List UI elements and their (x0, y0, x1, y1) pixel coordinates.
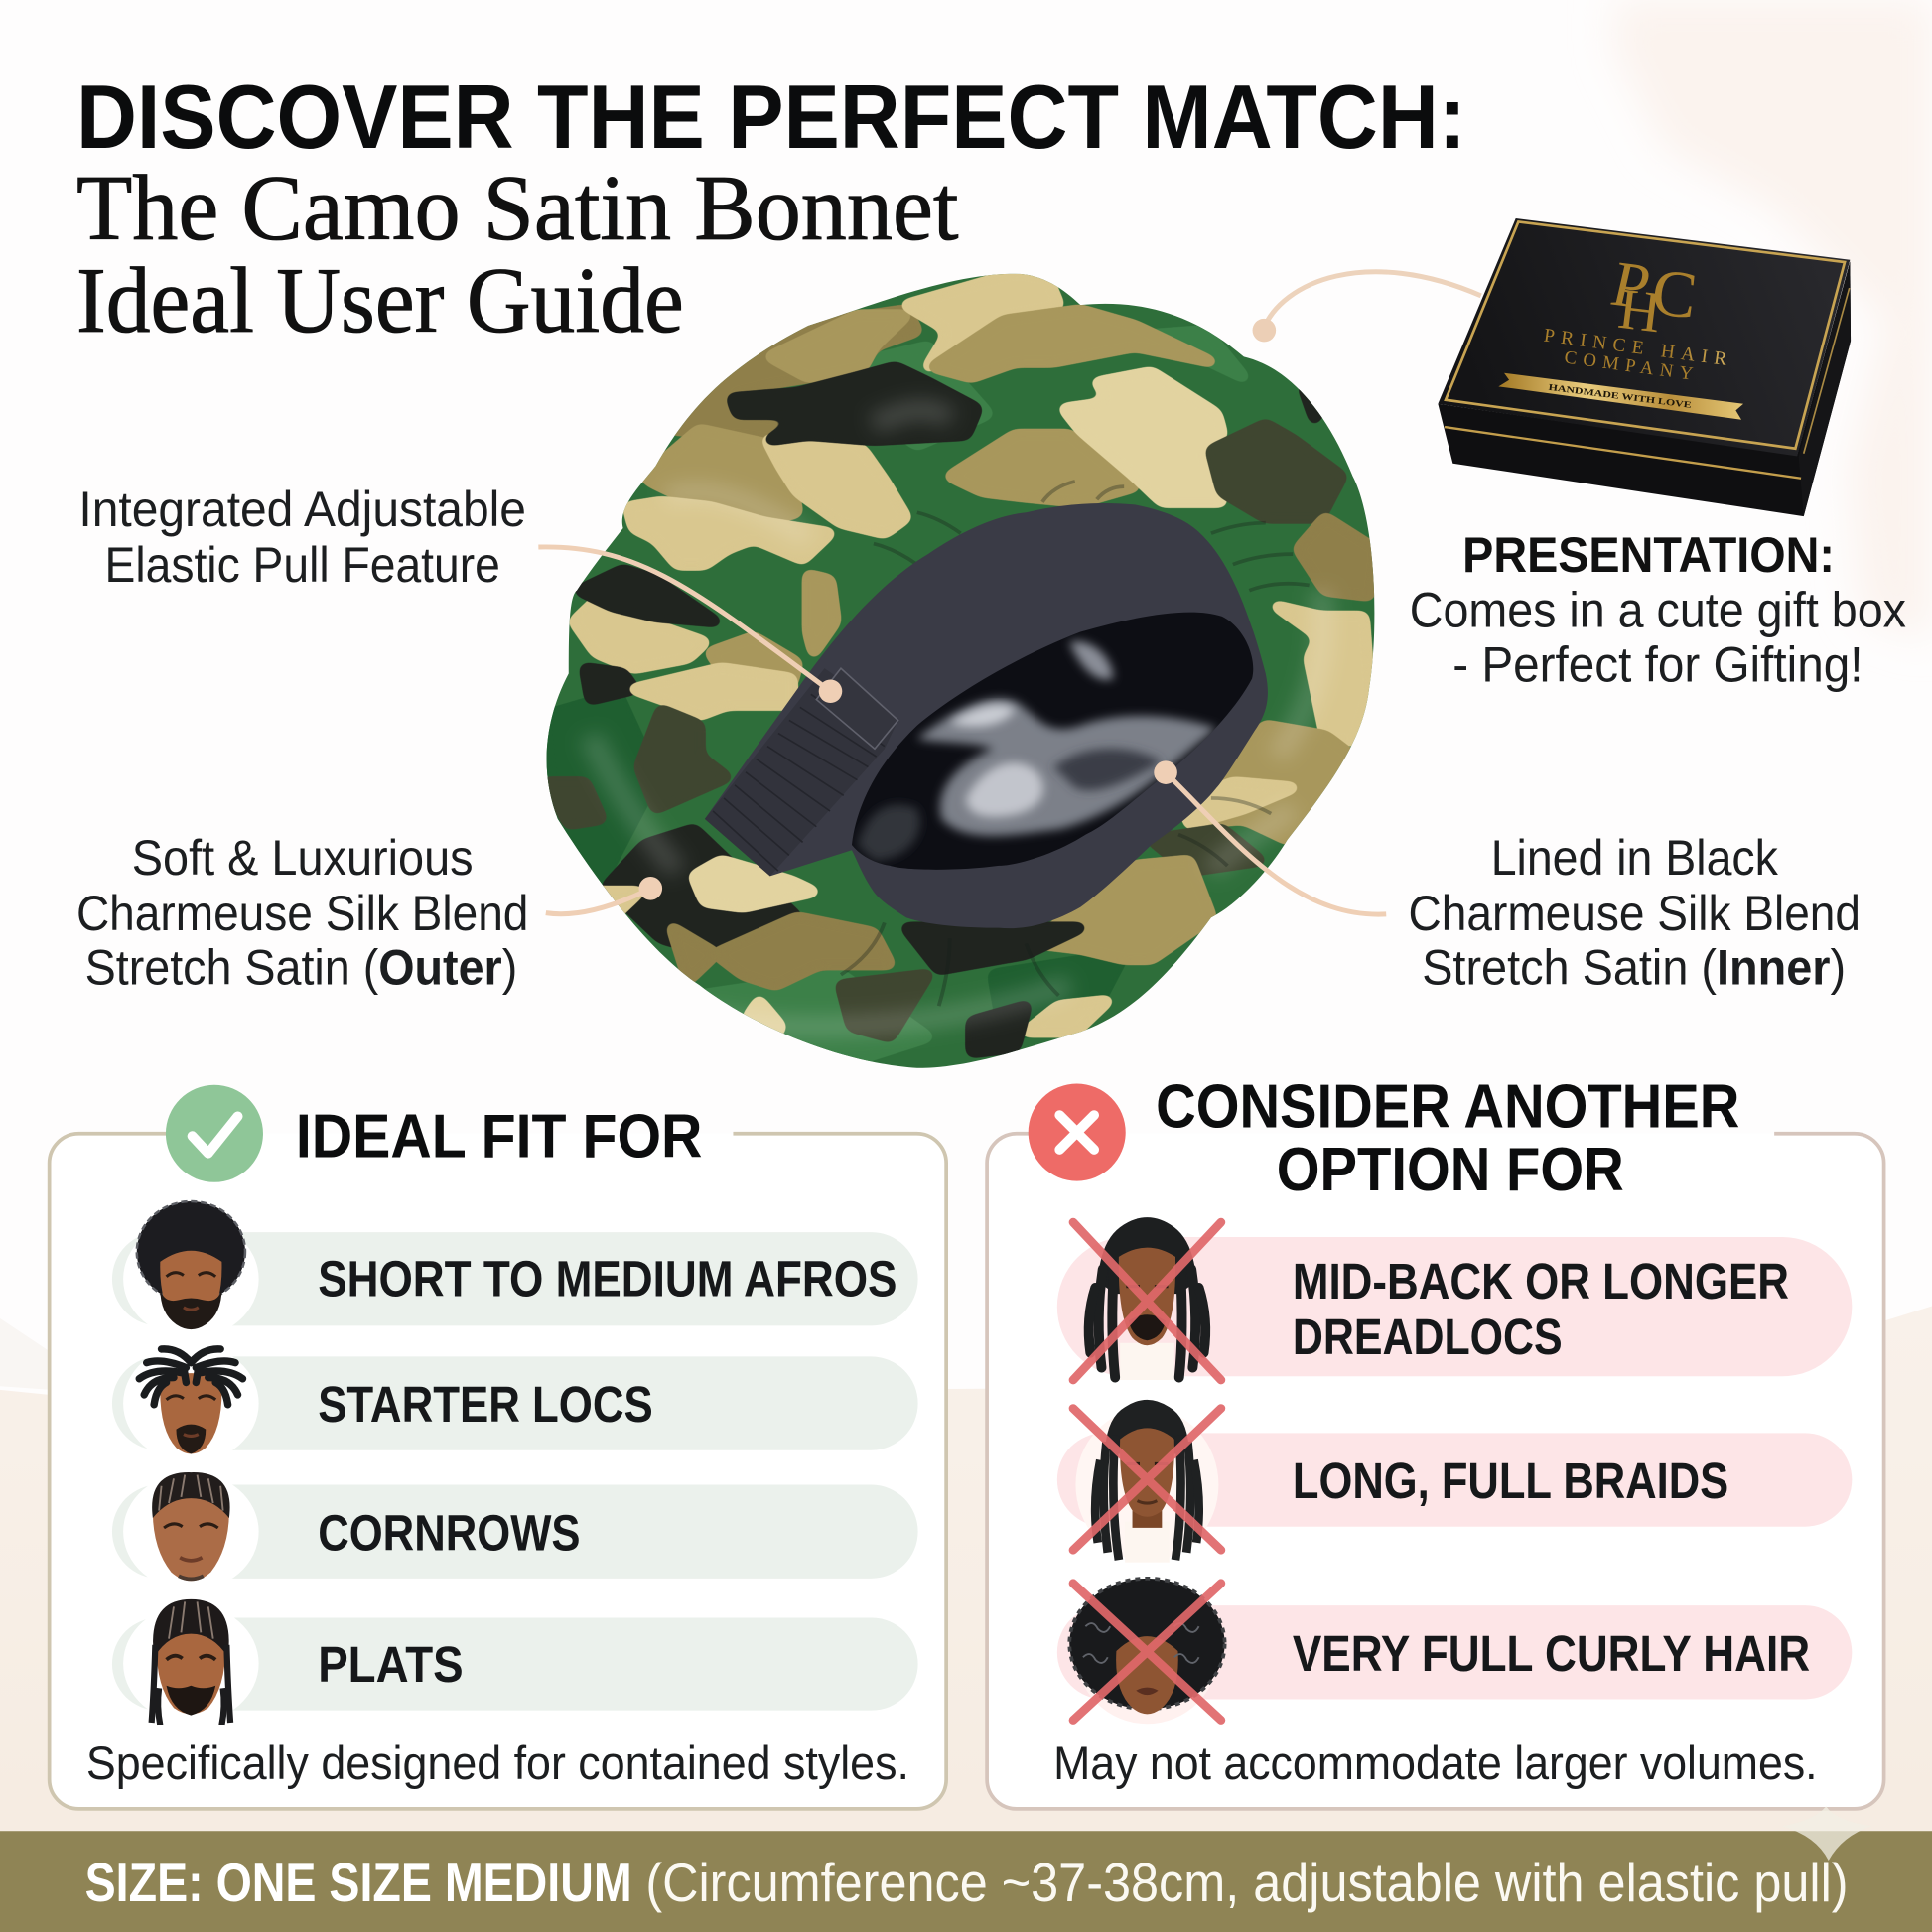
heading: ideal fit: IDEAL FIT FOR (296, 1102, 702, 1171)
callout: inner lining label: Lined in Black (1491, 830, 1778, 886)
gold ribbon (1498, 373, 1743, 420)
callout line: elastic pull (538, 547, 842, 703)
callout: elastic pull label: Integrated Adjustable (78, 482, 526, 537)
icon: afro face (137, 1201, 245, 1329)
monogram: C (1648, 255, 1701, 333)
icon: green check (166, 1085, 263, 1182)
monogram: P (1605, 248, 1657, 323)
monogram (1605, 248, 1701, 345)
label: MID-BACK OR LONGER (1293, 1253, 1789, 1310)
cross (1073, 1222, 1221, 1380)
callout: inner lining label: Stretch Satin (Inner) (1422, 940, 1846, 996)
icon: cornrows face (152, 1472, 230, 1581)
label: SHORT TO MEDIUM AFROS (318, 1251, 897, 1308)
heading: consider another: OPTION FOR (1277, 1136, 1624, 1204)
size bold text: SIZE: ONE SIZE MEDIUM (85, 1853, 632, 1913)
row: short to medium afros (112, 1201, 918, 1338)
gathered folds around band (841, 482, 1310, 1006)
callout: presentation: - Perfect for Gifting! (1452, 636, 1863, 692)
callout: presentation: Comes in a cute gift box (1410, 583, 1906, 638)
box side (1438, 261, 1851, 516)
brand name second line: COMPANY (1563, 347, 1696, 385)
title line: guide: Ideal User Guide (76, 249, 684, 352)
callout: outer fabric label: Stretch Satin (Outer) (85, 940, 517, 996)
row: cornrows (112, 1472, 918, 1590)
label: LONG, FULL BRAIDS (1293, 1452, 1728, 1509)
icon: plats face (152, 1599, 230, 1725)
callout: outer fabric label (76, 830, 528, 996)
panel note: Specifically designed for contained styles. (86, 1736, 909, 1789)
row: dreadlocs (1057, 1217, 1852, 1380)
row: long braids (1057, 1400, 1852, 1563)
label: DREADLOCS (1293, 1309, 1563, 1365)
icon: starter locs face (139, 1349, 242, 1453)
callout: inner lining label (1409, 830, 1861, 996)
callout: presentation: PRESENTATION: (1462, 527, 1835, 583)
box lid (1438, 218, 1850, 456)
panel: consider another option (987, 1073, 1884, 1809)
icon: red x (1029, 1084, 1126, 1181)
callout: outer fabric label: Soft & Luxurious (132, 830, 474, 886)
headband ring (705, 503, 1268, 928)
camo satin bonnet photo (536, 258, 1390, 1072)
title (76, 68, 1466, 352)
icon: braids face crossed (1073, 1400, 1221, 1563)
monogram: H (1615, 276, 1665, 345)
cross (1073, 1409, 1221, 1550)
row: plats (112, 1599, 918, 1725)
cross (1073, 1584, 1221, 1721)
panel: ideal fit for (50, 1085, 946, 1809)
label: CORNROWS (318, 1504, 581, 1561)
callout: elastic pull label (78, 482, 526, 593)
callout: elastic pull label: Elastic Pull Feature (104, 537, 500, 593)
callout: inner lining label: Charmeuse Silk Blend (1409, 886, 1861, 941)
callout: outer fabric label: Charmeuse Silk Blend (76, 886, 528, 941)
sparkle decoration (1782, 1806, 1871, 1861)
label: VERY FULL CURLY HAIR (1293, 1625, 1810, 1682)
heading: consider another: CONSIDER ANOTHER (1156, 1073, 1739, 1142)
row: very full curly hair (1057, 1579, 1852, 1724)
row: starter locs (112, 1344, 918, 1462)
silk lining interior (852, 612, 1253, 870)
size detail text: (Circumference ~37-38cm, adjustable with elastic pull) (645, 1853, 1849, 1913)
label (1293, 1253, 1789, 1365)
callout line: outer fabric (546, 877, 662, 914)
title line: bold heading: DISCOVER THE PERFECT MATCH: (76, 68, 1466, 168)
gift box (1438, 218, 1851, 516)
callout line: inner lining (1154, 760, 1386, 914)
ribbon text: HANDMADE WITH LOVE (1548, 382, 1692, 410)
bonnet camo outer (536, 258, 1390, 1072)
title line: product name: The Camo Satin Bonnet (76, 157, 959, 260)
icon: curly hair face crossed (1069, 1579, 1225, 1721)
brand name: PRINCE HAIR (1543, 326, 1730, 370)
label: STARTER LOCS (318, 1376, 653, 1433)
callout: presentation (1410, 527, 1906, 692)
label: PLATS (318, 1636, 464, 1693)
panel note: May not accommodate larger volumes. (1053, 1736, 1818, 1789)
size banner (0, 1806, 1932, 1932)
callout line: gift box (1253, 272, 1481, 342)
icon: dreadlocs face crossed (1073, 1217, 1221, 1380)
heading: consider another (1156, 1073, 1739, 1204)
satin sheen (591, 410, 1322, 1027)
adjustable elastic pull strap (705, 668, 898, 876)
